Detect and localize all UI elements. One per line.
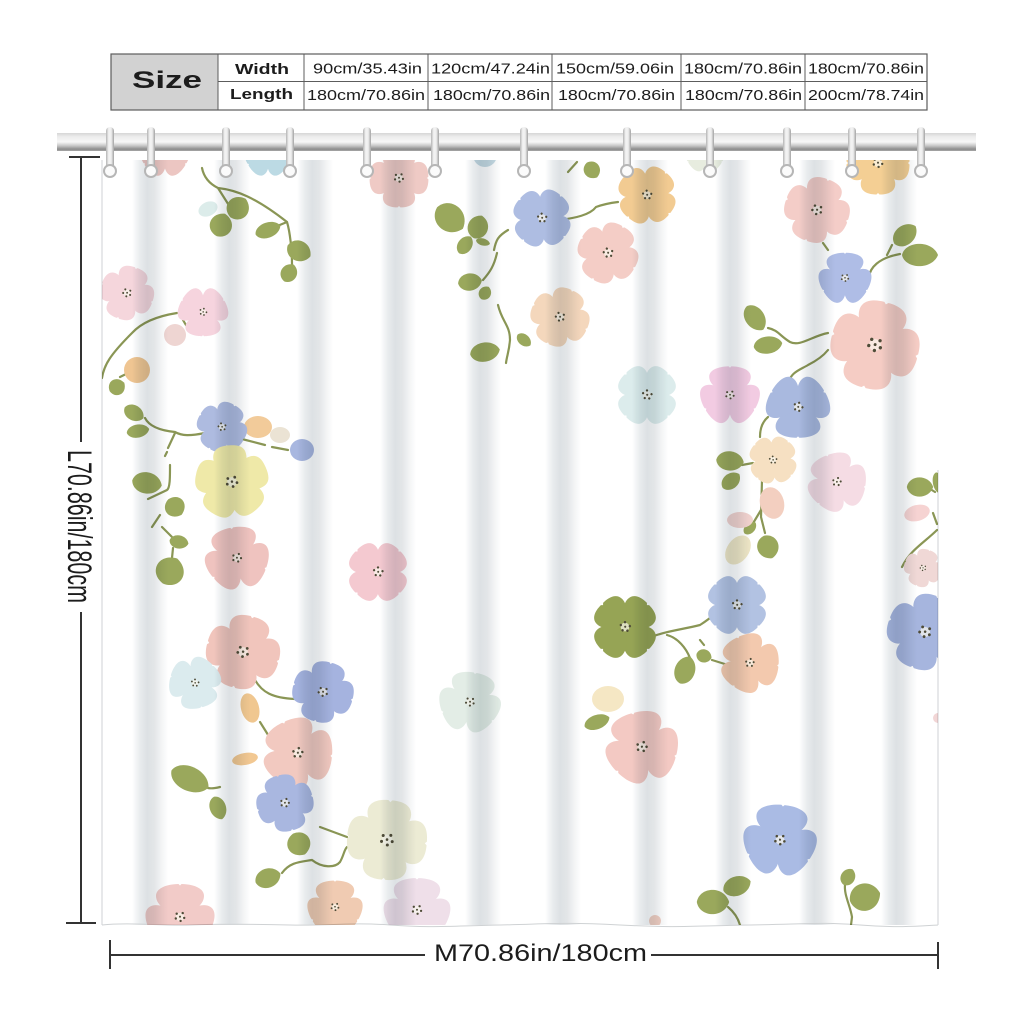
flower: pink lower centre xyxy=(591,702,694,797)
flower: cream xyxy=(347,800,427,880)
size label cell: Size xyxy=(132,67,202,94)
width arrow lines xyxy=(110,940,938,969)
width values: 180cm/70.86in xyxy=(808,60,924,78)
length values: 180cm/70.86in xyxy=(685,87,802,104)
height arrow lines xyxy=(66,157,100,923)
curtain rod xyxy=(57,133,976,151)
length values: 180cm/70.86in xyxy=(558,87,675,104)
ring 10 xyxy=(781,127,793,177)
size label cell xyxy=(111,54,218,110)
length values: 180cm/70.86in xyxy=(307,87,425,104)
ring 4 xyxy=(284,127,296,177)
flower: peach centre xyxy=(530,287,590,347)
row headers xyxy=(230,61,293,103)
flower: olive xyxy=(579,581,671,673)
flower: orange top right xyxy=(846,160,910,194)
flower: pink bottom clipped xyxy=(146,884,214,925)
height label: L70.86in/180cm xyxy=(60,450,98,603)
flower: blue top right xyxy=(818,252,872,303)
flower: pale green sliver xyxy=(687,160,723,172)
flower: orange upper centre xyxy=(618,166,676,224)
flower: pink branch xyxy=(178,288,228,336)
flower: pale pink left xyxy=(102,266,154,320)
ring 12 xyxy=(915,127,927,177)
curtain fabric folds xyxy=(102,160,938,925)
flower: blue lower right xyxy=(708,576,766,634)
width values xyxy=(313,60,924,78)
stems xyxy=(102,162,937,925)
ring 9 xyxy=(704,127,716,177)
flower: pale green xyxy=(439,672,501,732)
height dimension xyxy=(60,157,100,923)
flower: large pink right xyxy=(830,300,920,390)
curtain panel xyxy=(102,160,938,928)
flower: blue small xyxy=(256,774,314,832)
flower: pink top right xyxy=(784,177,850,243)
flower: pale blue xyxy=(169,656,222,709)
flower: blue left xyxy=(196,402,248,452)
flower: pink lower left xyxy=(204,526,269,590)
width values: 120cm/47.24in xyxy=(431,60,550,78)
ring 7 xyxy=(518,127,530,177)
flower: peach bottom xyxy=(307,880,363,925)
ring 6 xyxy=(429,127,441,177)
flower: large pink left xyxy=(206,614,280,690)
length values: 200cm/78.74in xyxy=(808,87,924,104)
length values xyxy=(307,87,924,104)
flower: lilac right xyxy=(808,452,866,512)
buds xyxy=(124,198,943,927)
flower: peach lower right xyxy=(706,622,796,707)
flower: pink top-left clipped xyxy=(142,160,188,176)
ring 2 xyxy=(145,127,157,177)
flower: blue right xyxy=(766,376,830,438)
width label: M70.86in/180cm xyxy=(434,940,647,967)
flower: pale blue top clipped xyxy=(246,160,286,176)
flower: blue upper centre xyxy=(514,190,570,246)
ring 1 xyxy=(104,127,116,177)
flower: lilac bottom xyxy=(384,878,450,925)
floral print xyxy=(102,160,938,925)
row headers: Width xyxy=(235,61,289,78)
row headers: Length xyxy=(230,86,293,103)
flower: blue xyxy=(292,661,354,723)
flower: blue edge right xyxy=(877,584,973,680)
width dimension xyxy=(110,940,938,969)
width values: 180cm/70.86in xyxy=(684,60,802,78)
flower: peach right xyxy=(750,436,796,484)
flower: pink centre xyxy=(349,543,407,601)
width values: 150cm/59.06in xyxy=(556,60,674,78)
ring 8 xyxy=(621,127,633,177)
flower: yellow xyxy=(195,445,268,518)
curtain edges xyxy=(102,160,938,927)
flower: pink upper centre xyxy=(578,222,638,284)
table grid xyxy=(111,54,927,110)
flower: pink edge right xyxy=(899,544,947,592)
curtain rings xyxy=(104,127,927,177)
flower: blue bottom right xyxy=(733,801,826,883)
flower: orchid xyxy=(700,366,760,424)
ring 3 xyxy=(220,127,232,177)
ring 5 xyxy=(361,127,373,177)
flower: pink lower xyxy=(264,718,332,786)
flower: pink top xyxy=(370,160,428,208)
flower: pale blue centre xyxy=(618,366,676,424)
width values: 90cm/35.43in xyxy=(313,60,422,78)
size table xyxy=(111,54,927,110)
ring 11 xyxy=(846,127,858,177)
length values: 180cm/70.86in xyxy=(433,87,550,104)
flower: pale blue sliver xyxy=(474,160,496,167)
leaves xyxy=(106,158,945,914)
